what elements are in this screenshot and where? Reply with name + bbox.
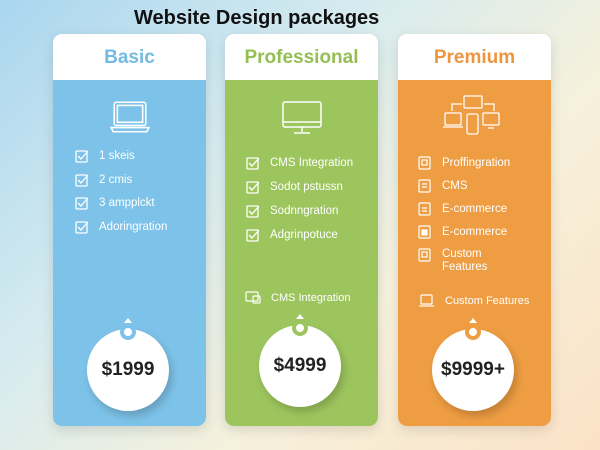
heading: basic: Basic	[104, 47, 155, 68]
price badge: premium	[432, 318, 520, 419]
panel: premium: Proffingration	[442, 157, 510, 169]
price badge: professional	[259, 314, 346, 414]
icon: devices	[443, 95, 500, 135]
feature list: premium	[418, 156, 510, 273]
panel: basic: 1 skeis	[99, 150, 135, 162]
panel: professional	[225, 34, 378, 426]
feature list: basic	[75, 150, 167, 234]
panel: premium: E-commerce	[442, 226, 507, 238]
panel: professional: CMS Integration	[270, 157, 353, 169]
title: Website Design packages	[134, 7, 379, 29]
heading: professional	[225, 34, 378, 80]
heading: basic	[53, 34, 206, 80]
panel: premium: Features	[442, 261, 487, 273]
panel: professional: Sodnngration	[270, 205, 338, 217]
heading: professional: Professional	[244, 47, 359, 68]
icon: laptop	[110, 102, 150, 132]
panel: basic: Adoringration	[99, 221, 167, 233]
extra feature: cms integration	[245, 291, 350, 304]
heading: premium: Premium	[434, 47, 515, 68]
extra feature: cms integration: CMS Integration	[271, 292, 350, 304]
panel: premium: $9999+	[441, 359, 505, 380]
panel: premium	[398, 34, 551, 426]
panel: premium: Custom	[442, 248, 482, 260]
panel: basic: 2 cmis	[99, 174, 132, 186]
icon: monitor	[282, 101, 322, 134]
extra feature: custom features: Custom Features	[445, 295, 529, 307]
panel: professional: Adgrinpotuce	[270, 229, 338, 241]
panel: basic	[53, 34, 206, 426]
panel: premium: E-commerce	[442, 203, 507, 215]
panel: basic: 3 ampplckt	[99, 197, 155, 209]
panel: premium: CMS	[442, 180, 468, 192]
feature list: professional	[246, 157, 353, 242]
panel: basic: $1999	[102, 359, 154, 380]
heading: premium	[398, 34, 551, 80]
price badge: basic	[87, 318, 175, 419]
panel: professional: Sodot pstussn	[270, 181, 343, 193]
panel: professional: $4999	[274, 355, 326, 376]
